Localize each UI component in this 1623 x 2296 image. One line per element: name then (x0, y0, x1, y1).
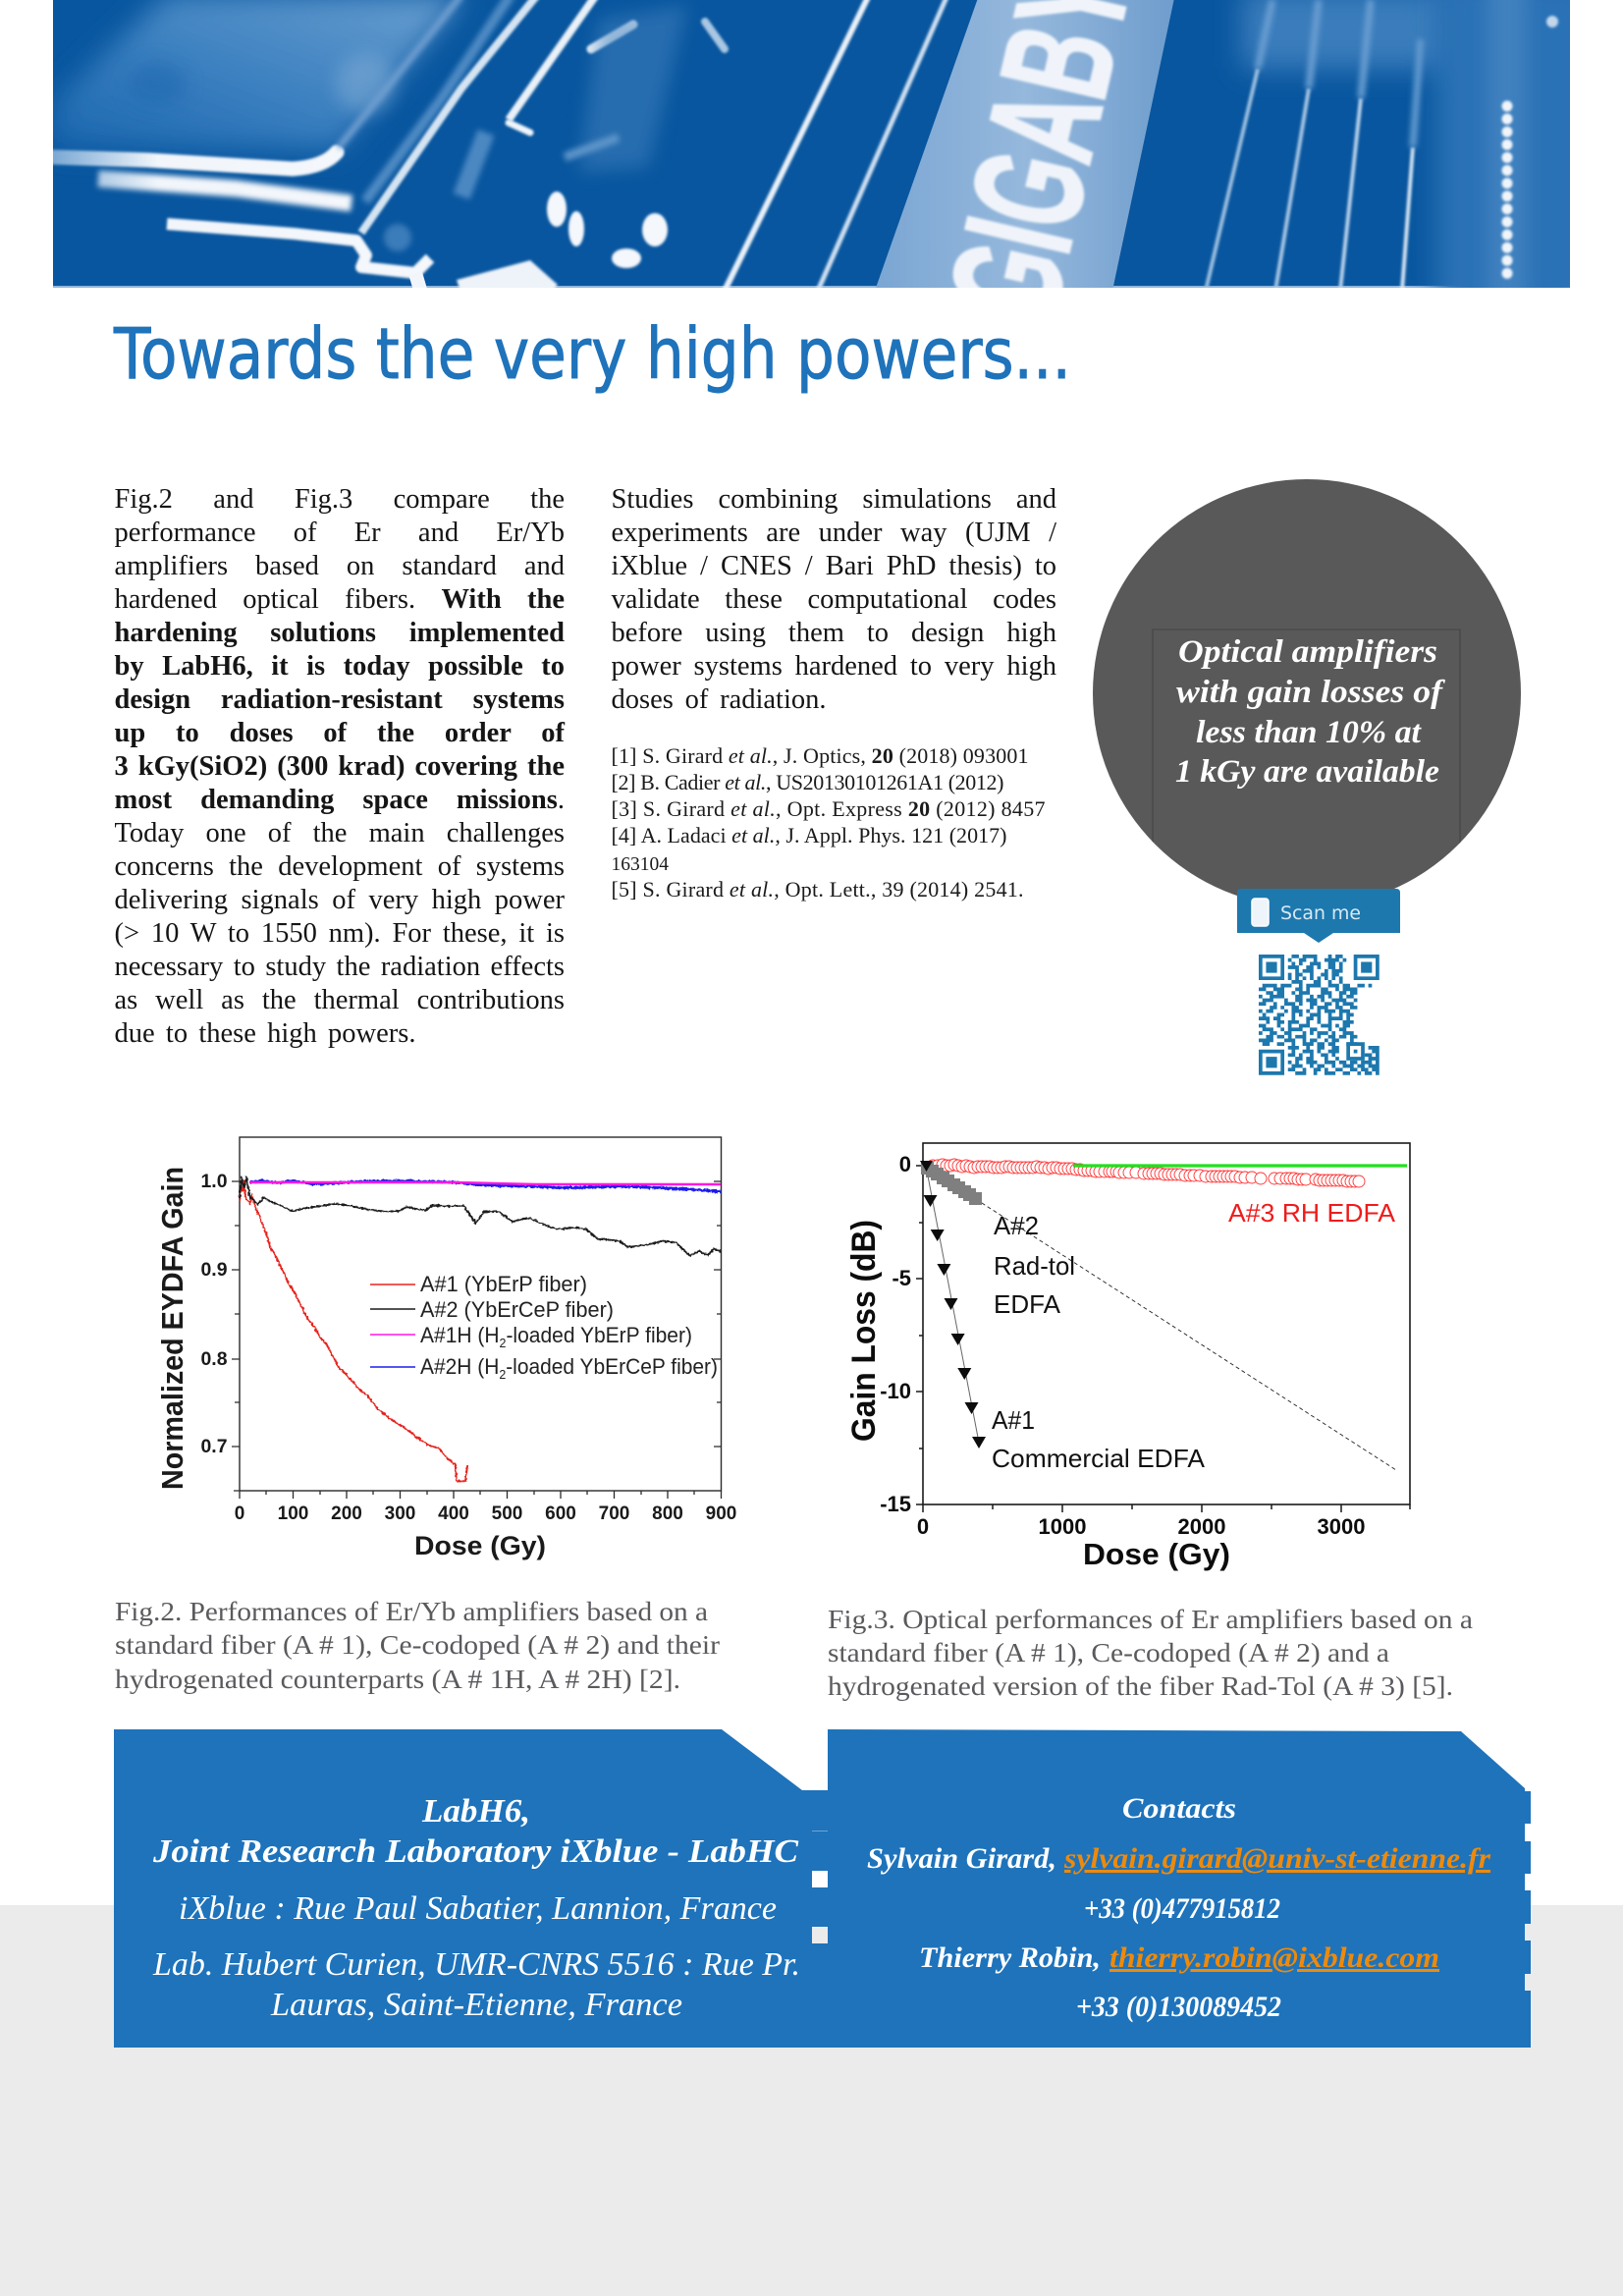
panel text: contacts: Sylvain Girard, (867, 1842, 1056, 1875)
references list: [4] A. Ladaci et al., J. Appl. Phys. 121 (2017) (611, 823, 1007, 847)
green reference line right (1073, 1164, 1407, 1168)
panel text: LabH6 address: Joint Research Laboratory iXblue - LabHC (152, 1833, 798, 1870)
title: Towards the very high powers... (113, 313, 1071, 395)
rad-tol extrapolation dashed line (924, 1166, 1396, 1470)
references list: [3] S. Girard et al., Opt. Express 20 (2012) 8457 (611, 796, 1045, 821)
chart annotations: Commercial EDFA (992, 1444, 1206, 1473)
curves of the gain chart (240, 1176, 721, 1481)
loss chart tick labels: -15 (880, 1492, 911, 1516)
loss chart tick labels: Gain Loss (dB) (845, 1220, 883, 1442)
caption: Fig.2: Fig.2. Performances of Er/Yb amplifiers based on a (115, 1597, 708, 1626)
circle callout (1093, 479, 1521, 923)
gain chart tick labels: 800 (652, 1503, 683, 1524)
gain chart tick labels: 0.7 (200, 1437, 228, 1457)
chart annotations: Rad-tol (994, 1251, 1075, 1281)
gain chart legend: 2 (499, 1367, 506, 1382)
scan me tag (1237, 889, 1400, 943)
scan me tag: Scan me (1280, 902, 1361, 924)
references list: 163104 (611, 854, 669, 875)
circle callout: Optical amplifiers (1178, 634, 1437, 670)
green reference line left (923, 1165, 1073, 1167)
text block: left column body: by LabH6, it is today possible to (114, 651, 565, 682)
panel text: LabH6 address: Lab. Hubert Curien, UMR-CNRS 5516 : Rue Pr. (152, 1946, 800, 1983)
gain chart tick labels: 1.0 (200, 1172, 228, 1192)
chart annotations: A#1 (992, 1405, 1035, 1435)
gain chart tick labels: 0.8 (200, 1349, 228, 1370)
text block: left column body: performance of Er and Er/Yb (114, 518, 565, 548)
A#3 circle markers (933, 1165, 1359, 1181)
panel text: LabH6 address: iXblue : Rue Paul Sabatier, Lannion, France (179, 1890, 777, 1927)
loss chart tick labels: -10 (880, 1379, 911, 1403)
commercial EDFA trend line (926, 1166, 979, 1443)
gain chart legend: -loaded YbErP fiber) (506, 1323, 692, 1347)
chart: gain loss vs dose (845, 1143, 1410, 1571)
gain chart legend: A#1 (YbErP fiber) (420, 1272, 587, 1296)
gain chart tick labels: 600 (545, 1503, 576, 1524)
A#1 triangle markers (920, 1161, 986, 1449)
panel text: contacts: Contacts (1122, 1792, 1236, 1825)
gain chart tick labels: 0 (235, 1503, 244, 1524)
text block: middle column body: iXblue / CNES / Bari PhD thesis) to (611, 551, 1056, 581)
text block: middle column body: validate these computational codes (611, 584, 1056, 615)
panel text: LabH6 address: LabH6, (421, 1793, 530, 1830)
caption: Fig.3 (828, 1605, 1473, 1701)
caption: Fig.3: hydrogenated version of the fiber Rad-Tol (A # 3) [5]. (828, 1671, 1453, 1701)
text block: left column body: delivering signals of very high power (114, 885, 565, 915)
gain chart tick labels: 500 (492, 1503, 522, 1524)
loss chart tick labels: 2000 (1178, 1514, 1225, 1539)
caption: Fig.2: hydrogenated counterparts (A # 1H, A # 2H) [2]. (115, 1665, 680, 1694)
text block: left column body: Fig.2 and Fig.3 compare the (114, 484, 565, 515)
text block: left column body: most demanding space missions. (114, 785, 565, 815)
gain chart tick labels: Dose (Gy) (414, 1531, 546, 1560)
gain chart legend: A#1H (H (420, 1323, 503, 1347)
gain chart tick labels: 900 (706, 1503, 736, 1524)
text block: left column body (114, 484, 566, 1049)
panel text: contacts: thierry.robin@ixblue.com (1109, 1941, 1439, 1974)
bottom grey background band (0, 1905, 1623, 2296)
chart annotations: A#2 (994, 1211, 1039, 1240)
panel text: contacts: +33 (0)477915812 (1084, 1892, 1280, 1925)
panel text: LabH6 address (152, 1793, 800, 2023)
chart annotations: A#3 RH EDFA (1228, 1198, 1396, 1228)
loss chart tick labels: -5 (892, 1266, 911, 1290)
gain chart tick labels: 300 (385, 1503, 415, 1524)
panel text: contacts: Thierry Robin, (919, 1941, 1101, 1974)
circle callout: with gain losses of (1176, 675, 1445, 710)
text block: left column body: design radiation-resistant systems (114, 684, 565, 715)
A#2 square markers (921, 1162, 982, 1205)
caption: Fig.3: standard fiber (A # 1), Ce-codoped (A # 2) and a (828, 1638, 1389, 1667)
gain chart legend (370, 1272, 718, 1382)
panel text: LabH6 address: Lauras, Saint-Etienne, France (270, 1987, 682, 2023)
text block: left column body: 3 kGy(SiO2) (300 krad) covering the (114, 751, 565, 782)
circle callout: 1 kGy are available (1175, 754, 1439, 790)
chart annotations (992, 1198, 1396, 1473)
gain chart tick labels: Normalized EYDFA Gain (155, 1167, 189, 1490)
gain chart tick labels: 700 (599, 1503, 629, 1524)
text block: left column body: (> 10 W to 1550 nm). For these, it is (114, 918, 565, 949)
caption: Fig.2: standard fiber (A # 1), Ce-codoped (A # 2) and their (115, 1630, 720, 1660)
text block: left column body: as well as the thermal contributions (114, 985, 565, 1015)
gain chart tick labels: 100 (278, 1503, 308, 1524)
gain chart legend: A#2H (H (420, 1354, 503, 1379)
loss chart tick labels: 0 (899, 1152, 911, 1176)
banner photo: circuit board duotone (53, 0, 1570, 288)
gain chart legend: A#2 (YbErCeP fiber) (420, 1297, 614, 1322)
gain chart tick labels: 200 (331, 1503, 362, 1524)
loss chart tick labels: 3000 (1318, 1514, 1365, 1539)
text block: left column body: up to doses of the order of (114, 718, 565, 748)
QR code (1259, 955, 1380, 1075)
text block: middle column body: doses of radiation. (611, 684, 827, 715)
text block: left column body: concerns the development of systems (114, 851, 565, 882)
panels: blue footer shape (114, 1729, 1531, 2048)
text block: left column body: necessary to study the radiation effects (114, 952, 565, 982)
panel text: contacts (867, 1792, 1490, 2023)
text block: middle column body (611, 484, 1056, 715)
gain chart legend: 2 (500, 1336, 506, 1350)
text block: middle column body: experiments are under way (UJM / (611, 518, 1056, 548)
references list: [5] S. Girard et al., Opt. Lett., 39 (2014) 2541. (611, 877, 1023, 902)
text block: middle column body: power systems hardened to very high (611, 651, 1056, 682)
references list: [2] B. Cadier et al., US20130101261A1 (2012) (611, 770, 1003, 794)
text block: left column body: due to these high powers. (114, 1018, 416, 1049)
text block: middle column body: Studies combining simulations and (611, 484, 1056, 515)
references list: [1] S. Girard et al., J. Optics, 20 (2018) 093001 (611, 743, 1029, 768)
gain chart tick labels: 0.9 (200, 1260, 228, 1281)
text block: middle column body: before using them to design high (611, 618, 1056, 648)
loss chart tick labels (845, 1152, 1365, 1571)
gain chart tick labels (155, 1167, 736, 1560)
chart: normalized EYDFA gain vs dose (155, 1137, 736, 1560)
text block: left column body: amplifiers based on standard and (114, 551, 565, 581)
gain chart legend: -loaded YbErCeP fiber) (506, 1354, 718, 1379)
chart annotations: EDFA (994, 1289, 1061, 1319)
text block: left column body: hardening solutions implemented (114, 618, 565, 648)
loss chart tick labels: 1000 (1039, 1514, 1086, 1539)
caption: Fig.3: Fig.3. Optical performances of Er amplifiers based on a (828, 1605, 1473, 1634)
panel text: contacts: +33 (0)130089452 (1076, 1991, 1281, 2023)
gain chart tick labels: 400 (438, 1503, 469, 1524)
loss chart tick labels: 0 (917, 1514, 929, 1539)
loss chart tick labels: Dose (Gy) (1083, 1537, 1230, 1571)
text block: left column body: hardened optical fibers. With the (114, 584, 565, 615)
panel text: contacts: sylvain.girard@univ-st-etienne.fr (1063, 1842, 1490, 1875)
references list (611, 743, 1045, 902)
text block: left column body: Today one of the main challenges (114, 818, 565, 848)
caption: Fig.2 (115, 1597, 720, 1694)
circle callout: less than 10% at (1196, 715, 1422, 750)
